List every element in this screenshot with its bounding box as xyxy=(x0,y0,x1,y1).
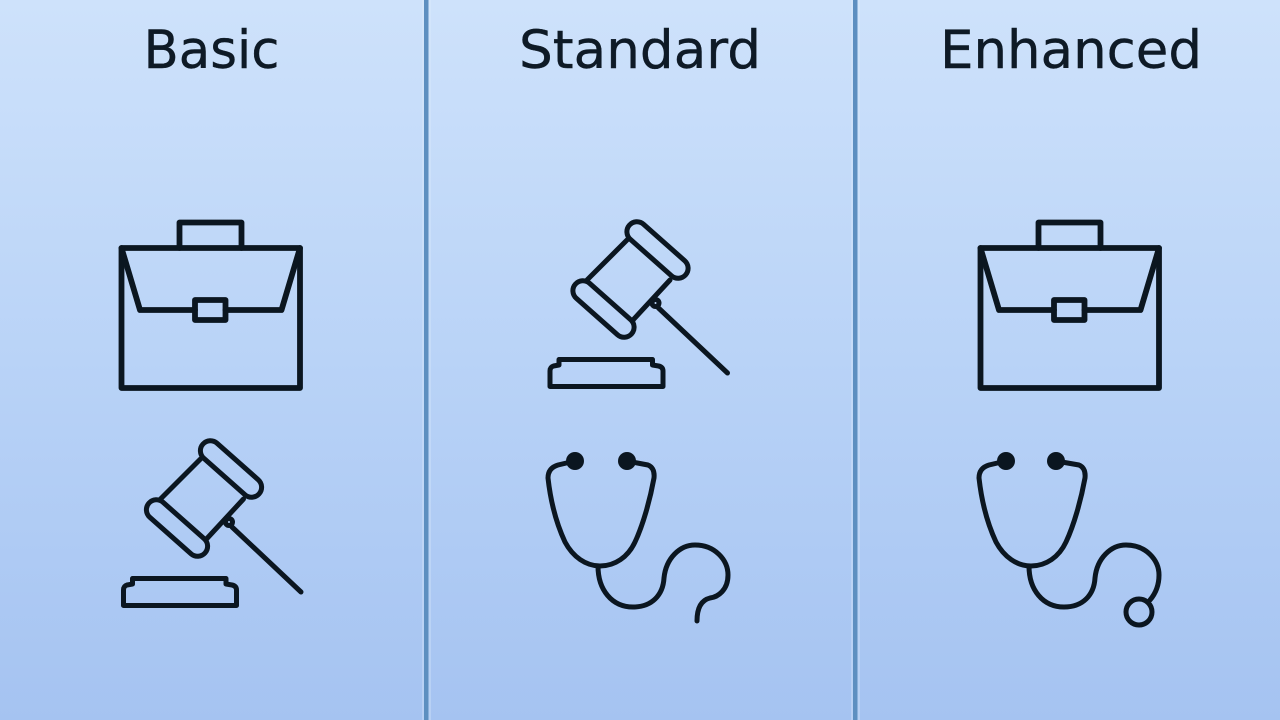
icon: briefcase xyxy=(980,222,1159,388)
panel: Enhanced xyxy=(940,20,1202,625)
icon: gavel xyxy=(550,218,728,386)
heading: Enhanced: Enhanced xyxy=(940,20,1202,81)
icon: stethoscope xyxy=(548,452,728,621)
icon: briefcase xyxy=(122,222,300,388)
heading: Basic: Basic xyxy=(144,20,280,81)
panel: Standard xyxy=(519,20,761,621)
heading: Standard: Standard xyxy=(519,20,761,81)
panel: Basic xyxy=(122,20,301,606)
icon: stethoscope with chest piece xyxy=(979,452,1159,625)
icon: gavel xyxy=(124,437,301,606)
